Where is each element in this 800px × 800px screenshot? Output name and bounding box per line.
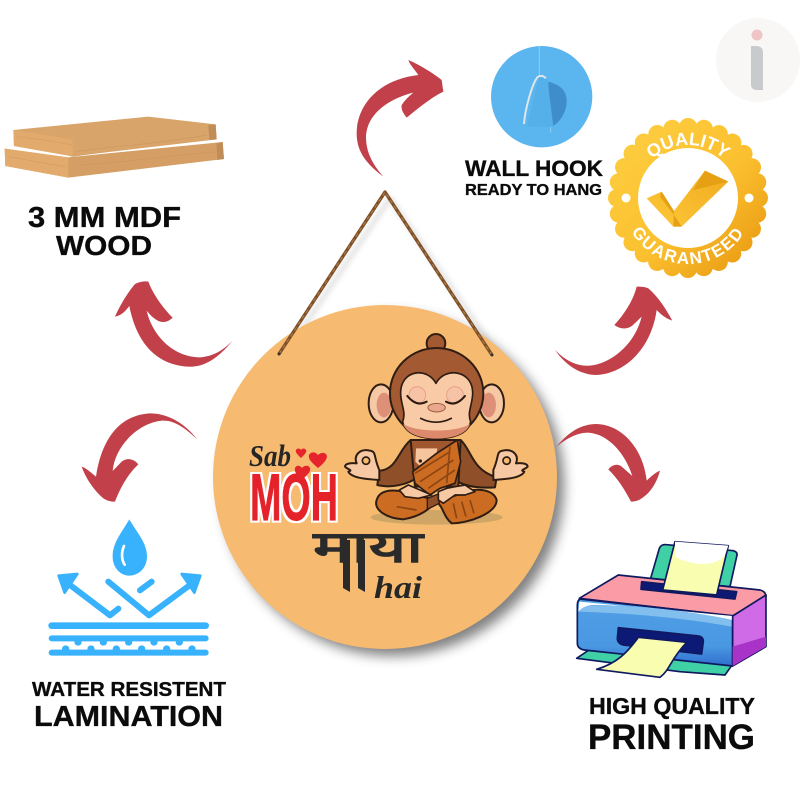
- label: wall hook: READY TO HANG: [465, 182, 602, 199]
- label: water resistant lamination: WATER RESISTENT: [32, 679, 226, 701]
- label: 3 mm mdf wood: [28, 202, 181, 261]
- label: 3 mm mdf wood: 3 MM MDF: [28, 202, 181, 234]
- label: high quality printing: HIGH QUALITY: [589, 693, 755, 719]
- text: moh: MOH: [250, 460, 338, 534]
- right hand: [493, 450, 528, 480]
- hearts: [295, 448, 327, 480]
- label: wall hook: WALL HOOK: [465, 156, 603, 181]
- rope shadow: [284, 198, 498, 356]
- icon: wood planks: [5, 117, 224, 178]
- icon: quality guaranteed badge: QUALITY: [647, 132, 732, 157]
- board shadow: [222, 314, 564, 656]
- arrow: to lamination: [82, 413, 197, 502]
- arrow: to quality badge: [555, 287, 672, 375]
- monkey head: [369, 334, 504, 439]
- text: sab: Sab: [249, 438, 291, 473]
- icon: quality guaranteed badge: GUARANTEED: [633, 228, 742, 264]
- watermark logo: [716, 18, 800, 102]
- icon: quality guaranteed badge: [608, 118, 768, 278]
- monkey body: [345, 440, 528, 525]
- left hand: [345, 450, 379, 480]
- board disc: [213, 305, 557, 649]
- label: 3 mm mdf wood: WOOD: [56, 230, 152, 261]
- label: high quality printing: PRINTING: [588, 718, 755, 757]
- label: water resistant lamination: [32, 679, 226, 733]
- icon: printer: [577, 542, 766, 677]
- monkey illustration: [345, 334, 528, 525]
- text: hai: hai: [374, 569, 422, 605]
- icon: water resistant: [52, 519, 206, 653]
- arrow: to wall hook: [357, 60, 443, 177]
- label: water resistant lamination: LAMINATION: [34, 701, 223, 733]
- text: maya: माया: [312, 523, 425, 572]
- arrow: to wood: [115, 281, 233, 367]
- icon: wall hook: [491, 46, 592, 147]
- label: wall hook: [465, 156, 603, 199]
- hanging rope: [278, 192, 494, 356]
- label: high quality printing: [588, 693, 755, 757]
- maya long stems: [343, 540, 365, 592]
- hanging board: [213, 192, 564, 656]
- arrow: to printing: [556, 424, 660, 502]
